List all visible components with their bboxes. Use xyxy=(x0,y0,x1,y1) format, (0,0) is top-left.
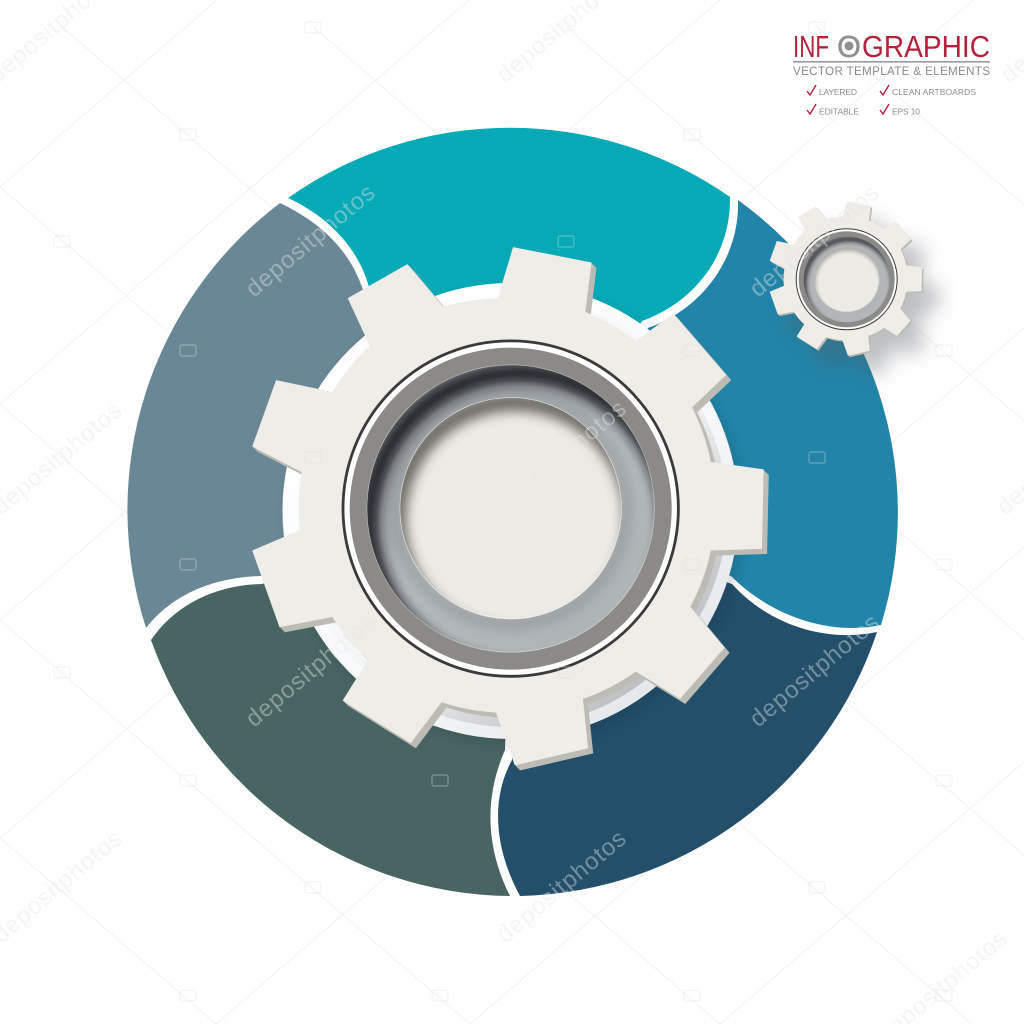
small gear shadow xyxy=(785,220,939,376)
segment: teal xyxy=(288,128,730,511)
hub grey ring xyxy=(350,348,672,670)
segment: navy xyxy=(498,511,877,896)
hub mid ring xyxy=(367,365,654,652)
check list: EDITABLE xyxy=(819,106,859,116)
stock watermarks: depositphotos xyxy=(492,395,631,519)
gear face xyxy=(252,247,764,765)
segment: slate xyxy=(127,203,511,628)
halo ring behind main gear xyxy=(282,283,738,739)
logo target dot xyxy=(844,42,854,50)
segment: blue xyxy=(511,200,898,628)
small gear body xyxy=(770,201,924,357)
segment: green-grey xyxy=(151,511,511,896)
small gear xyxy=(770,201,924,357)
hub centre disc xyxy=(400,398,621,619)
stock watermarks: depositphotos xyxy=(241,179,380,303)
stock watermarks: depositphotos xyxy=(492,825,631,949)
check list xyxy=(807,85,976,116)
small gear hub xyxy=(796,229,897,330)
logo subtitle: VECTOR TEMPLATE & ELEMENTS xyxy=(793,66,990,78)
stock watermarks: depositphotos xyxy=(745,609,884,733)
logo title: GRAPHIC xyxy=(862,30,990,64)
stock watermarks: depositphotos xyxy=(241,609,380,733)
gear side bevel xyxy=(254,248,769,770)
check list: CLEAN ARTBOARDS xyxy=(892,87,976,97)
logo rule xyxy=(793,61,990,63)
shadow under halo ring xyxy=(287,289,743,745)
check list: EPS 10 xyxy=(892,106,920,116)
main gear hub xyxy=(343,341,678,676)
main gear xyxy=(252,247,769,770)
hub outer dark line xyxy=(343,341,678,676)
circular diagram of five interlocking segments xyxy=(127,128,898,896)
logo title: INF xyxy=(793,30,829,64)
stock watermarks: depositphotos xyxy=(745,179,884,303)
check list: LAYERED xyxy=(819,87,857,97)
logo title xyxy=(793,30,990,64)
logo block xyxy=(793,30,990,116)
logo title: O xyxy=(837,30,861,64)
